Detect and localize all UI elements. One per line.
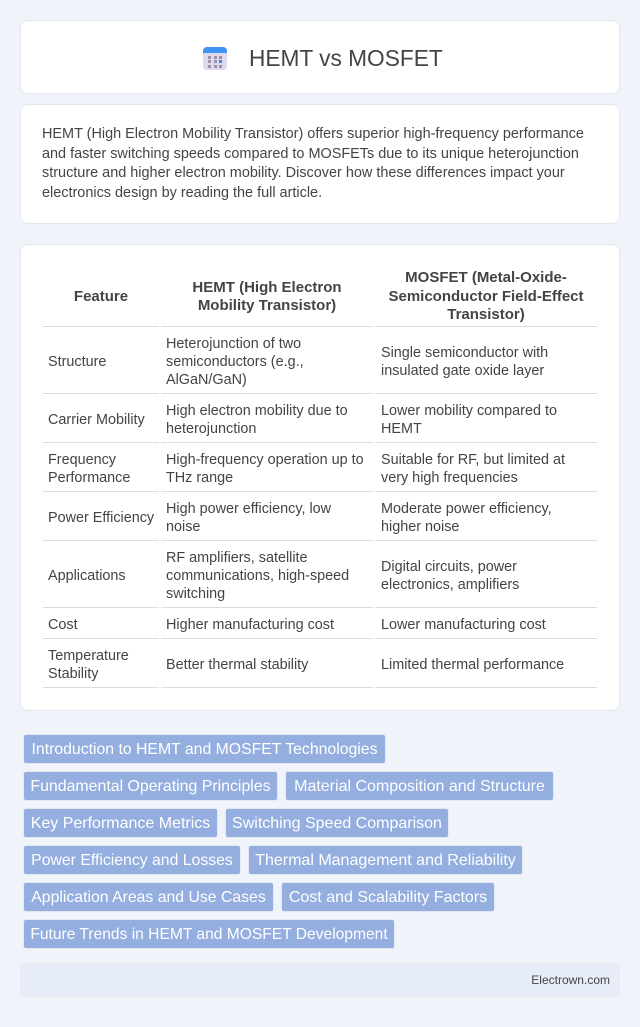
topic tags: Fundamental Operating Principles [30,778,271,795]
table header: MOSFET: Semiconductor Field-Effect [388,288,584,304]
topic tags: Future Trends in HEMT and MOSFET Development [30,926,388,943]
intro text: structure and higher electron mobility. Discover how these differences impact your [42,165,565,181]
intro panel [20,104,620,224]
table header: MOSFET: Transistor) [447,306,525,323]
topic tags: Switching Speed Comparison [232,815,442,832]
table rows: switching [166,586,225,602]
topic tags: Power Efficiency and Losses [31,852,233,869]
table header: HEMT: HEMT (High Electron [192,279,342,296]
comparison table panel [20,244,620,711]
table rows: Better thermal stability [166,657,308,673]
topic tags: Material Composition and Structure [294,778,545,795]
table rows: heterojunction [166,421,256,437]
table rows: Heterojunction of two [166,336,301,352]
table rows: THz range [166,470,233,486]
intro text: HEMT (High Electron Mobility Transistor) offers superior high-frequency performance [42,126,584,142]
table rows: High-frequency operation up to [166,452,364,468]
row: power efficiency: Power Efficiency [48,510,154,526]
icon: calendar [203,47,227,70]
row: temperature stability [48,648,129,682]
row: carrier mobility: Carrier Mobility [48,412,145,428]
table rows: Lower manufacturing cost [381,617,546,633]
table rows: HEMT [381,421,422,437]
row: temperature stability: Stability [48,666,98,682]
table rows: Higher manufacturing cost [166,617,334,633]
footer [20,963,620,997]
topic tags: Application Areas and Use Cases [31,889,266,906]
topic tags: Introduction to HEMT and MOSFET Technologies [32,741,377,758]
table header: HEMT: Mobility Transistor) [198,297,336,314]
table rows: Digital circuits, power [381,559,517,575]
table header: MOSFET: MOSFET (Metal-Oxide- [405,269,567,286]
topic tags [23,734,554,949]
table rows: electronics, amplifiers [381,577,519,593]
table rows: AlGaN/GaN) [166,372,247,388]
intro text: and faster switching speeds compared to MOSFETs due to its unique heterojunction [42,146,579,162]
table rows: semiconductors (e.g., [166,354,304,370]
row: temperature stability: Temperature [48,648,129,664]
table rows: Single semiconductor with [381,345,548,361]
title: HEMT vs MOSFET [249,45,443,71]
topic tags: Key Performance Metrics [31,815,210,832]
row: frequency performance [48,452,130,486]
table rows: noise [166,519,200,535]
topic tags: Thermal Management and Reliability [255,852,516,869]
table rows: Lower mobility compared to [381,403,557,419]
topic tags: Cost and Scalability Factors [289,889,487,906]
table rows: Limited thermal performance [381,657,564,673]
intro text: electronics design by reading the full article. [42,184,322,200]
table header: HEMT [192,279,342,314]
table rows: very high frequencies [381,470,518,486]
row: applications: Applications [48,568,126,584]
table rows: RF amplifiers, satellite [166,550,308,566]
table rows: higher noise [381,519,459,535]
table rows: High electron mobility due to [166,403,348,419]
row: frequency performance: Frequency [48,452,116,468]
table header: feature: Feature [74,288,128,305]
row: cost: Cost [48,617,78,633]
table header: MOSFET [388,269,584,323]
table rows: Suitable for RF, but limited at [381,452,565,468]
header panel [20,20,620,94]
table rows: Moderate power efficiency, [381,501,552,517]
table rows: communications, high-speed [166,568,349,584]
row: structure: Structure [48,354,106,370]
footer credit: Electrown.com [531,973,610,987]
table rows: insulated gate oxide layer [381,363,544,379]
table rows: High power efficiency, low [166,501,331,517]
row: frequency performance: Performance [48,470,130,486]
table rows [43,326,597,688]
intro text [42,126,584,200]
